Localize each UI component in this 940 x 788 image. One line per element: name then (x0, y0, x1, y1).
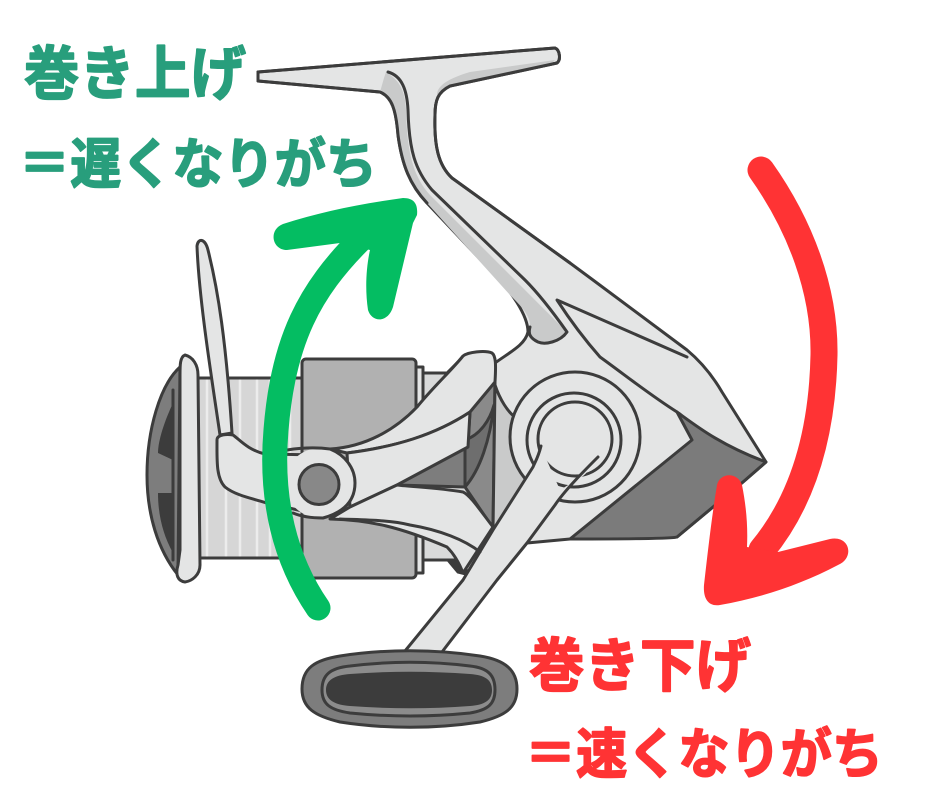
subtext: tends to be fast: ＝速くなりがち (525, 725, 883, 785)
roller hub (285, 448, 355, 518)
bail wire (197, 240, 232, 435)
stem shading (258, 48, 570, 343)
red shaft (761, 170, 824, 550)
subtext: tends to be slow: ＝遅くなりがち (19, 135, 377, 195)
arrow: red downward (704, 170, 848, 605)
upper bail arm (330, 352, 496, 453)
handle knob (302, 651, 517, 727)
spool flange (177, 355, 200, 582)
spool back cup (147, 367, 180, 575)
frame shadow triangles (397, 380, 495, 528)
body side panel (493, 385, 528, 530)
drive gear circles (510, 372, 640, 502)
line roller block (302, 359, 416, 578)
body dark wedge (570, 412, 766, 539)
rear small collar (416, 367, 423, 573)
illustration: spinning reel (147, 48, 766, 727)
spool with line (198, 378, 308, 558)
green shaft (275, 240, 360, 608)
lower bail contour (340, 519, 480, 552)
heading: winding up: 巻き上げ (24, 42, 246, 107)
green arrowhead (274, 198, 417, 319)
handle arm edges (405, 446, 598, 652)
arrow: green upward (274, 198, 417, 608)
middle bail arm (347, 412, 470, 507)
handle arm (405, 445, 598, 652)
bail left mount (217, 435, 320, 515)
rotor stem and body (258, 48, 766, 543)
rear line section (415, 373, 470, 560)
heading: winding down: 巻き下げ (529, 634, 751, 699)
body contour lines (557, 300, 687, 412)
rear dark details (448, 362, 466, 574)
lower bail arm (330, 485, 493, 573)
red arrowhead (704, 475, 848, 605)
